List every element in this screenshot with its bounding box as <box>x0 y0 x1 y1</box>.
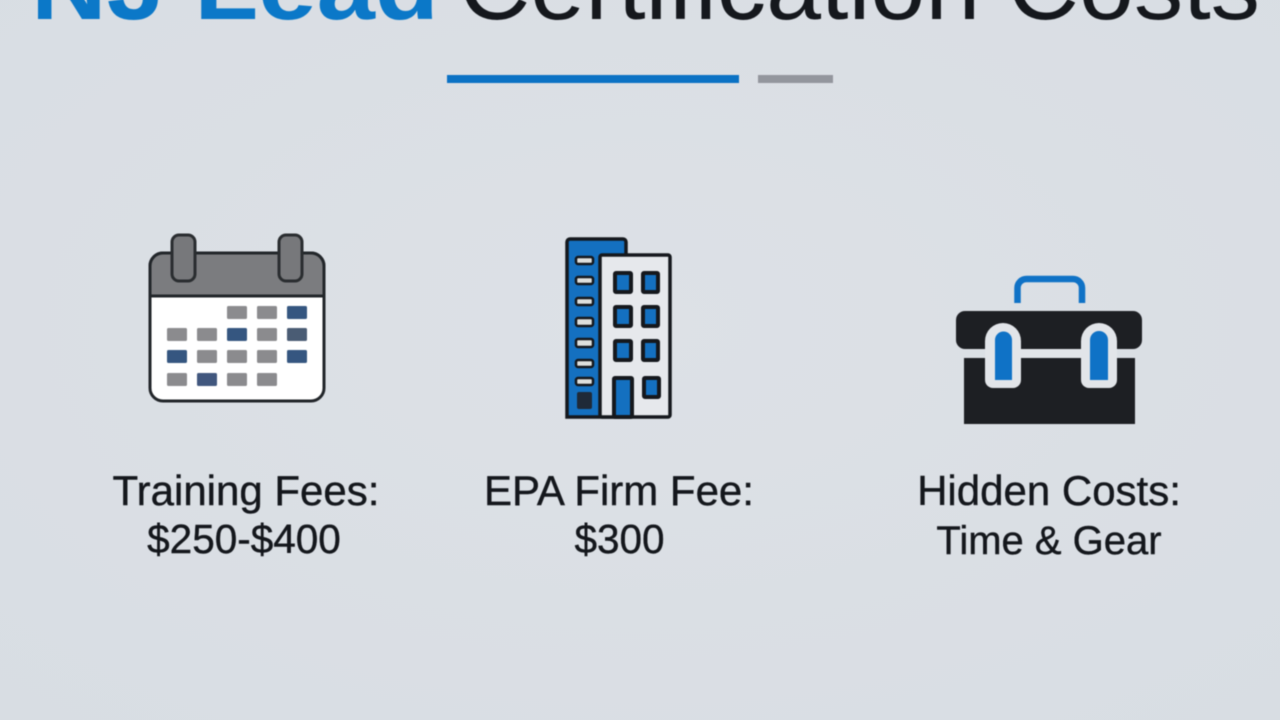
label: EPA firm fee <box>484 467 754 562</box>
title <box>31 0 1260 40</box>
icon: calendar <box>150 235 324 401</box>
label: training fees: $250-$400 <box>147 516 341 562</box>
label: hidden costs: Time & Gear <box>936 519 1162 563</box>
label: training fees <box>113 467 379 562</box>
title underline accent <box>447 75 833 83</box>
icon: toolbox <box>956 279 1142 424</box>
label: EPA firm fee: $300 <box>574 516 665 562</box>
label: hidden costs <box>917 467 1181 563</box>
icon: office building <box>567 239 670 417</box>
label: hidden costs: Hidden Costs: <box>917 467 1181 514</box>
label: training fees: Training Fees: <box>113 467 379 514</box>
label: EPA firm fee: EPA Firm Fee: <box>484 467 754 514</box>
